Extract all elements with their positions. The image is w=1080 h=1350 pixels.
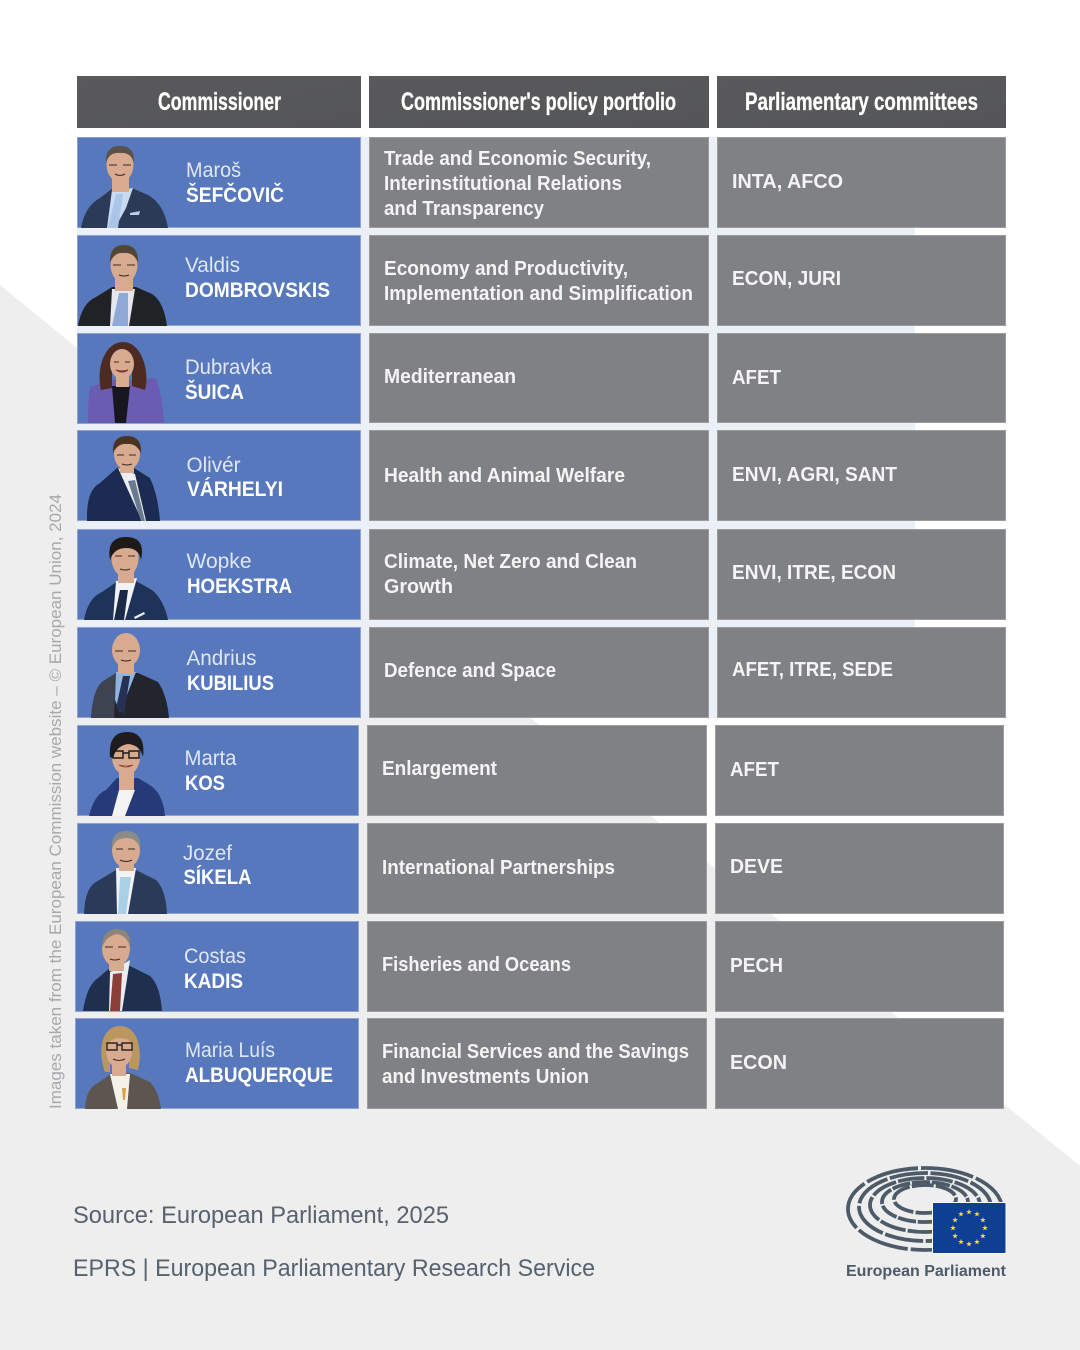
commissioner cell background bbox=[76, 922, 358, 1012]
name: SÍKELA bbox=[184, 866, 252, 889]
name bbox=[184, 944, 246, 993]
portfolio: International Partnerships bbox=[382, 856, 615, 879]
name bbox=[186, 549, 292, 598]
name: Maria Luís bbox=[185, 1038, 275, 1062]
portfolio bbox=[368, 726, 706, 816]
committees: PECH bbox=[730, 954, 783, 977]
table header row bbox=[77, 76, 1006, 128]
portrait: Andrius Kubilius bbox=[91, 633, 169, 718]
header: Commissioner bbox=[77, 76, 361, 128]
row: Šefčovič bbox=[78, 138, 1006, 228]
name: Olivér bbox=[186, 453, 240, 477]
icon: EU flag bbox=[932, 1202, 1006, 1254]
committees bbox=[718, 430, 1006, 520]
name bbox=[185, 253, 330, 302]
icon: hemicycle bbox=[848, 1168, 1002, 1250]
portfolio: Financial Services and the Savings bbox=[382, 1040, 689, 1063]
portfolio: Economy and Productivity, bbox=[384, 257, 628, 280]
name: Wopke bbox=[186, 549, 252, 573]
commissioner cell background bbox=[76, 1018, 358, 1108]
logo wordmark: European Parliament bbox=[846, 1263, 1007, 1280]
committees: AFET, ITRE, SEDE bbox=[732, 658, 893, 681]
commissioner cell background bbox=[78, 430, 360, 520]
name: ŠUICA bbox=[185, 380, 244, 404]
portfolio bbox=[370, 138, 708, 228]
row: Várhelyi bbox=[78, 430, 1006, 521]
commissioner cell background bbox=[78, 824, 358, 914]
name: DOMBROVSKIS bbox=[185, 279, 330, 302]
portrait: Costas Kadis bbox=[83, 929, 162, 1011]
committees: AFET bbox=[732, 366, 781, 389]
committees bbox=[718, 236, 1006, 326]
header: Commissioner: Commissioner bbox=[158, 88, 281, 116]
portrait: Valdis Dombrovskis bbox=[78, 245, 167, 326]
commissioner cell background bbox=[78, 138, 360, 228]
committees bbox=[716, 824, 1004, 914]
image credit, rotated: Images taken from the European Commission website – © European Union, 2024 bbox=[47, 494, 65, 1109]
portrait: Wopke Hoekstra bbox=[84, 537, 168, 620]
header: Commissioner's policy portfolio: Commissioner's policy portfolio bbox=[401, 88, 676, 116]
committees: INTA, AFCO bbox=[732, 170, 843, 193]
portfolio bbox=[370, 430, 708, 520]
name: ŠEFČOVIČ bbox=[186, 183, 284, 207]
source line: Source: European Parliament, 2025 bbox=[73, 1202, 449, 1229]
committees bbox=[716, 922, 1004, 1012]
commissioner cell background bbox=[78, 530, 360, 620]
committees: ECON bbox=[730, 1051, 787, 1074]
portfolio bbox=[368, 922, 706, 1012]
header: Commissioner's policy portfolio bbox=[369, 76, 709, 128]
commissioner cell background bbox=[78, 628, 360, 718]
row: Síkela bbox=[78, 824, 1004, 914]
name: KUBILIUS bbox=[187, 672, 274, 695]
committees: ENVI, AGRI, SANT bbox=[732, 463, 897, 486]
portfolio bbox=[370, 628, 708, 718]
committees bbox=[718, 334, 1006, 422]
portfolio: Interinstitutional Relations bbox=[384, 172, 622, 195]
committees bbox=[718, 138, 1006, 228]
header: Parliamentary committees: Parliamentary committees bbox=[745, 88, 978, 116]
committees: AFET bbox=[730, 758, 779, 781]
committees bbox=[716, 1018, 1004, 1108]
committees bbox=[716, 726, 1004, 816]
name: Marta bbox=[184, 746, 237, 770]
portfolio: Trade and Economic Security, bbox=[384, 147, 651, 170]
name bbox=[186, 453, 283, 501]
header: Parliamentary committees bbox=[717, 76, 1006, 128]
row: Hoekstra bbox=[78, 530, 1006, 620]
background: grey diagonal area bbox=[0, 285, 1080, 1350]
portfolio: Enlargement bbox=[382, 757, 497, 780]
name bbox=[186, 646, 274, 695]
commissioner cell background bbox=[78, 334, 360, 424]
portfolio: Climate, Net Zero and Clean bbox=[384, 550, 637, 573]
name: KOS bbox=[185, 772, 225, 795]
name bbox=[186, 158, 284, 207]
portfolio: Mediterranean bbox=[384, 365, 516, 388]
commissioner cell background bbox=[78, 236, 360, 326]
portrait: Maroš Šefčovič bbox=[81, 146, 168, 228]
committees: DEVE bbox=[730, 855, 783, 878]
row: Kubilius bbox=[78, 628, 1006, 718]
portfolio bbox=[368, 824, 706, 914]
portfolio bbox=[370, 236, 708, 326]
name: KADIS bbox=[184, 970, 243, 993]
name bbox=[184, 746, 237, 795]
committees bbox=[718, 628, 1006, 718]
name: Jozef bbox=[183, 841, 232, 865]
committees: ECON, JURI bbox=[732, 267, 841, 290]
portfolio: and Investments Union bbox=[382, 1065, 589, 1088]
row: Kos bbox=[78, 726, 1004, 816]
portfolio bbox=[370, 334, 708, 422]
portfolio bbox=[370, 530, 708, 620]
row: Albuquerque bbox=[76, 1018, 1004, 1109]
portrait: Olivér Várhelyi bbox=[87, 436, 160, 521]
name: Andrius bbox=[186, 646, 256, 670]
row: Dombrovskis bbox=[78, 236, 1006, 326]
logo: European Parliament bbox=[846, 1168, 1007, 1280]
name: Valdis bbox=[185, 253, 240, 277]
portfolio: and Transparency bbox=[384, 197, 545, 220]
publisher line: EPRS | European Parliamentary Research Service bbox=[73, 1255, 595, 1282]
portfolio: Health and Animal Welfare bbox=[384, 464, 625, 487]
portfolio: Fisheries and Oceans bbox=[382, 953, 571, 976]
portfolio bbox=[368, 1018, 706, 1108]
name bbox=[185, 1038, 333, 1087]
committees: ENVI, ITRE, ECON bbox=[732, 561, 896, 584]
portrait: Dubravka Šuica bbox=[88, 342, 164, 423]
row: Šuica bbox=[78, 334, 1006, 424]
name: Costas bbox=[184, 944, 246, 968]
name: HOEKSTRA bbox=[187, 575, 292, 598]
portfolio: Growth bbox=[384, 575, 453, 598]
commissioner cell background bbox=[78, 726, 358, 816]
committees bbox=[718, 530, 1006, 620]
name: ALBUQUERQUE bbox=[185, 1064, 333, 1087]
row: Kadis bbox=[76, 922, 1004, 1012]
portrait: Maria Luís Albuquerque bbox=[85, 1026, 161, 1109]
portfolio: Implementation and Simplification bbox=[384, 282, 693, 305]
name bbox=[185, 355, 272, 404]
name bbox=[183, 841, 252, 889]
portfolio: Defence and Space bbox=[384, 659, 556, 682]
name: Maroš bbox=[186, 158, 241, 182]
portrait: Jozef Síkela bbox=[84, 831, 167, 914]
name: VÁRHELYI bbox=[187, 478, 283, 501]
portrait: Marta Kos bbox=[89, 732, 165, 816]
name: Dubravka bbox=[185, 355, 272, 379]
